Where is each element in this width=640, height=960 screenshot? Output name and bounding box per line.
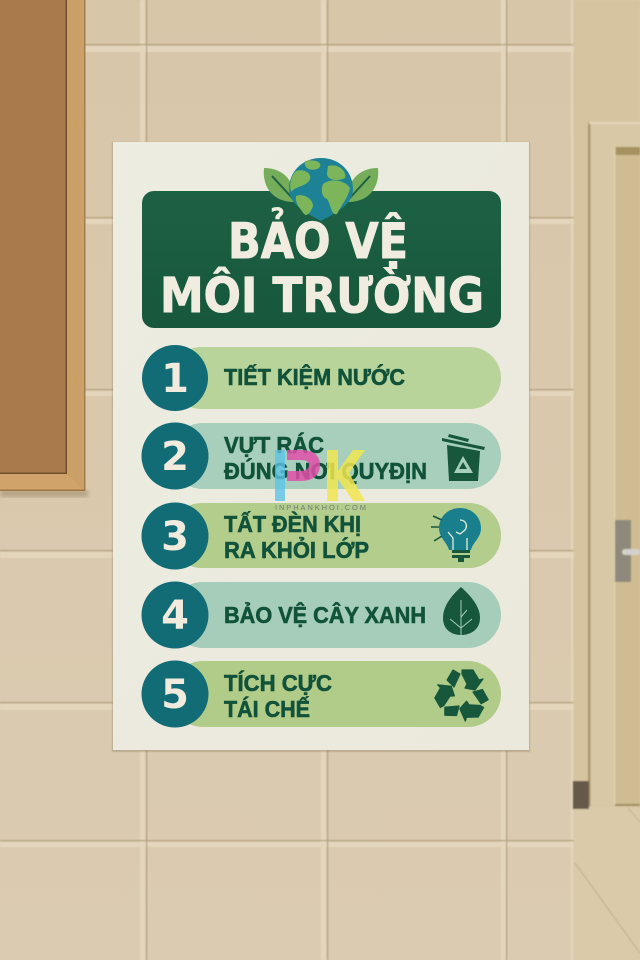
row 5: tích cực tái chế: TÁI CHẾ — [224, 695, 310, 722]
watermark: PK logo: INPHANKHOI.COM — [275, 503, 366, 512]
poster shadow — [112, 142, 530, 752]
hallway with door and floor — [573, 0, 640, 960]
icon: trash bin — [442, 434, 485, 481]
row 2: vứt rác — [142, 422, 501, 490]
row 5: tích cực tái chế: TÍCH CỰC — [224, 669, 332, 696]
row 2: vứt rác: ĐÚNG NƠI QUYĐỊN — [224, 457, 427, 484]
floor — [574, 807, 640, 960]
right leaf — [348, 168, 378, 202]
poster sheet — [113, 142, 529, 750]
row 1: tiết kiệm nước: 1 — [161, 356, 189, 402]
corkboard with wooden frame — [0, 0, 88, 497]
baseboard — [573, 781, 589, 809]
row 3: tắt đèn: RA KHỎI LỚP — [224, 535, 369, 563]
row 3: tắt đèn: TẤT ĐÈN KHỊ — [224, 510, 361, 537]
watermark: PK logo — [275, 450, 366, 512]
title banner — [142, 191, 501, 328]
poster — [112, 142, 530, 752]
icon: recycle — [430, 670, 491, 726]
row 1: tiết kiệm nước: TIẾT KIỆM NƯỚC — [224, 363, 405, 390]
title text: BẢO VỆ — [228, 206, 408, 270]
icon: leaf — [443, 587, 480, 645]
globe — [289, 158, 353, 221]
icon: light bulb — [431, 508, 481, 562]
door handle — [615, 520, 640, 582]
row 3: tắt đèn: 3 — [161, 514, 189, 560]
row 2: vứt rác: VỰT RÁC — [224, 431, 324, 458]
row 1: tiết kiệm nước — [142, 345, 501, 411]
icon: globe with leaves — [264, 158, 378, 221]
row 4: bảo vệ cây xanh: 4 — [161, 593, 189, 639]
title text — [160, 206, 484, 324]
row 5: tích cực tái chế: 5 — [161, 672, 189, 718]
row 4: bảo vệ cây xanh: BẢO VỆ CÂY XANH — [224, 600, 426, 628]
row 3: tắt đèn — [142, 502, 501, 570]
row 4: bảo vệ cây xanh — [142, 582, 501, 648]
row 2: vứt rác: 2 — [161, 434, 189, 480]
title text: MÔI TRƯỜNG — [160, 267, 484, 324]
left leaf — [264, 168, 294, 202]
row 5: tích cực tái chế — [142, 660, 501, 728]
